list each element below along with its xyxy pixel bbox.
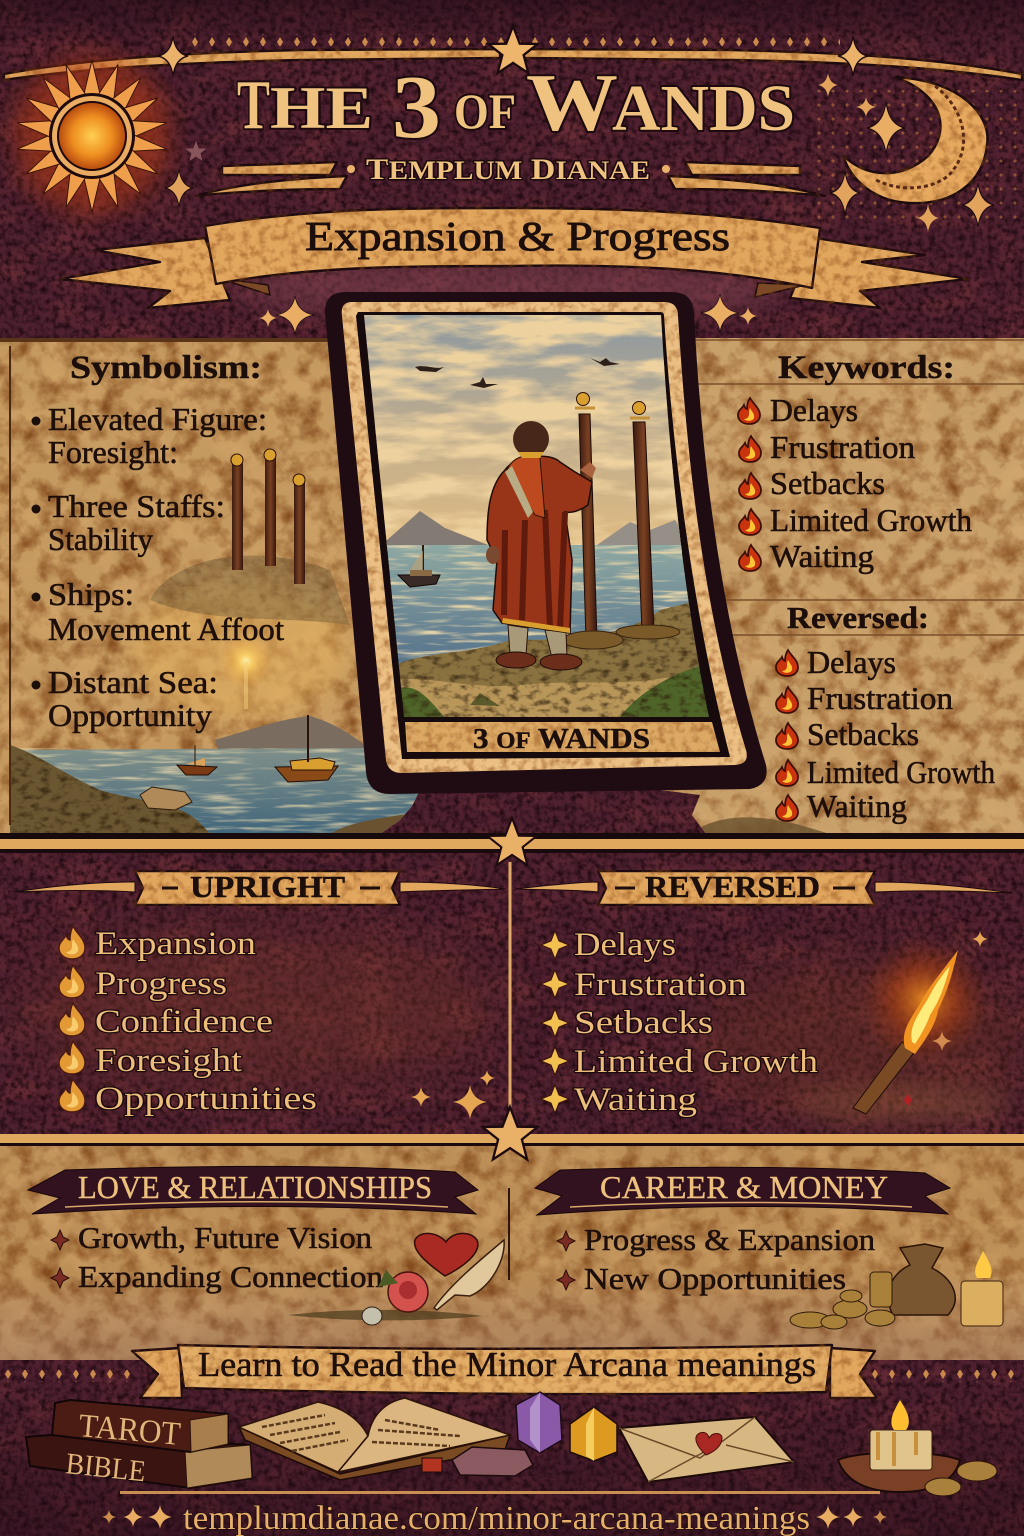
panel: love and career parchment	[0, 1140, 1024, 1360]
icon: crescent moon with stars	[815, 73, 1024, 232]
subtitle: Templum Dianae	[195, 153, 825, 196]
small boat	[398, 545, 440, 587]
icon: open book	[239, 1398, 510, 1480]
symbolism list: Elevated Figure:	[48, 402, 267, 437]
hillside behind staffs	[150, 556, 350, 625]
panel: symbolism	[0, 338, 420, 834]
icon: burning torch	[795, 931, 1015, 1121]
card label	[405, 722, 720, 755]
list: reversed meanings: Waiting	[574, 1082, 697, 1118]
boats	[177, 765, 217, 775]
symbolism list: Opportunity	[48, 698, 212, 733]
title: HE	[270, 75, 373, 141]
card frame	[325, 292, 767, 794]
heading: career and money: CAREER & MONEY	[600, 1169, 888, 1205]
symbolism list: Distant Sea:	[48, 665, 218, 700]
heading: reversed: REVERSED	[645, 869, 820, 904]
icon: tarot and bible books: TAROT	[77, 1408, 182, 1453]
icon: crystals and stone	[422, 1392, 617, 1476]
list: upright meanings: Expansion	[95, 926, 256, 962]
title: OF	[454, 83, 516, 139]
list: upright meanings: Opportunities	[95, 1081, 317, 1117]
sea	[10, 748, 420, 834]
keywords list	[738, 393, 972, 574]
banner: learn to read	[132, 1345, 877, 1398]
dotted rows beside banner	[0, 1370, 1024, 1382]
list: love: Expanding Connection	[78, 1259, 384, 1294]
footer url: templumdianae.com/minor-arcana-meanings	[183, 1500, 810, 1536]
keywords list: Waiting	[770, 539, 874, 574]
divider band: middle top	[0, 818, 1024, 1110]
heading: love and relationships: LOVE & RELATIONSHIPS	[78, 1169, 432, 1205]
list: upright meanings	[59, 926, 317, 1117]
title: T	[237, 67, 270, 144]
heading: reversed	[515, 869, 1012, 905]
icon: heart, rose and quill	[288, 1233, 504, 1325]
banner: Expansion & Progress: Expansion & Progress	[305, 213, 730, 259]
divider band: lower	[0, 1134, 1024, 1146]
icon: tarot and bible books	[26, 1400, 252, 1488]
star: lower divider	[482, 1107, 538, 1159]
keywords list: Delays	[770, 393, 858, 428]
rule above url	[120, 1491, 880, 1494]
symbolism list: Foresight:	[48, 435, 178, 470]
list: career: Progress & Expansion	[584, 1222, 876, 1257]
divider line	[508, 1188, 510, 1280]
title: W	[526, 57, 618, 148]
reversed keywords list: Frustration	[807, 681, 953, 716]
panel: keywords and reversed	[660, 338, 1024, 834]
symbolism list: Three Staffs:	[48, 489, 225, 524]
wand 2	[616, 402, 680, 639]
reversed heading: Reversed:	[787, 600, 929, 635]
staffs illustration	[231, 449, 305, 584]
card label: 3 OF WANDS	[473, 723, 650, 755]
title: ANDS	[612, 72, 795, 145]
list: upright meanings: Progress	[95, 966, 227, 1002]
tarot card	[325, 292, 767, 794]
wand 1	[563, 392, 623, 649]
reversed keywords list: Limited Growth	[807, 755, 995, 790]
birds in sky	[415, 358, 620, 388]
list: love	[51, 1220, 384, 1294]
keywords list: Frustration	[770, 430, 915, 465]
list: love: Growth, Future Vision	[78, 1220, 373, 1255]
list: reversed meanings: Limited Growth	[574, 1044, 819, 1080]
symbolism list: Ships:	[48, 577, 134, 612]
icon: sun	[14, 57, 206, 213]
reversed keywords list: Waiting	[807, 789, 907, 824]
list: reversed meanings: Setbacks	[574, 1005, 713, 1041]
symbolism list: Stability	[48, 522, 153, 557]
reversed keywords list	[776, 645, 995, 824]
icon: tarot and bible books: BIBLE	[64, 1447, 147, 1488]
list: career: New Opportunities	[584, 1261, 846, 1296]
title: 3	[392, 58, 441, 157]
heading: career and money	[535, 1167, 950, 1215]
list: career	[557, 1222, 876, 1296]
symbolism heading: Symbolism:	[70, 350, 262, 386]
icon: coin sack, coins and candle	[790, 1244, 1003, 1329]
sparkles	[411, 1070, 495, 1119]
icon: candle in bowl	[838, 1400, 997, 1496]
heading: upright: UPRIGHT	[190, 869, 345, 904]
header ornament: top band with stars	[4, 26, 1022, 80]
list: reversed meanings: Frustration	[574, 967, 747, 1003]
reversed keywords list: Setbacks	[807, 717, 919, 752]
list: upright meanings: Foresight	[95, 1043, 242, 1079]
subtitle: Templum Dianae: TEMPLUM DIANAE	[366, 153, 650, 186]
keywords list: Limited Growth	[770, 503, 972, 538]
list: reversed meanings	[541, 927, 819, 1118]
icon: sealed envelope	[619, 1417, 794, 1482]
list: reversed meanings: Delays	[574, 927, 676, 963]
keywords list: Setbacks	[770, 466, 885, 501]
heading: upright	[14, 869, 505, 905]
card scene	[360, 312, 715, 720]
banner: learn to read: Learn to Read the Minor Arcana meanings	[198, 1345, 816, 1384]
list: upright meanings: Confidence	[95, 1004, 273, 1040]
shoreline	[10, 745, 210, 834]
title	[237, 57, 795, 157]
symbolism list	[32, 402, 284, 733]
keywords heading: Keywords:	[778, 350, 955, 386]
reversed keywords list: Delays	[807, 645, 896, 680]
figure in red robe	[486, 421, 596, 670]
banner: Expansion & Progress	[60, 208, 968, 334]
symbolism list: Movement Affoot	[48, 612, 284, 647]
heading: love and relationships	[28, 1166, 478, 1214]
